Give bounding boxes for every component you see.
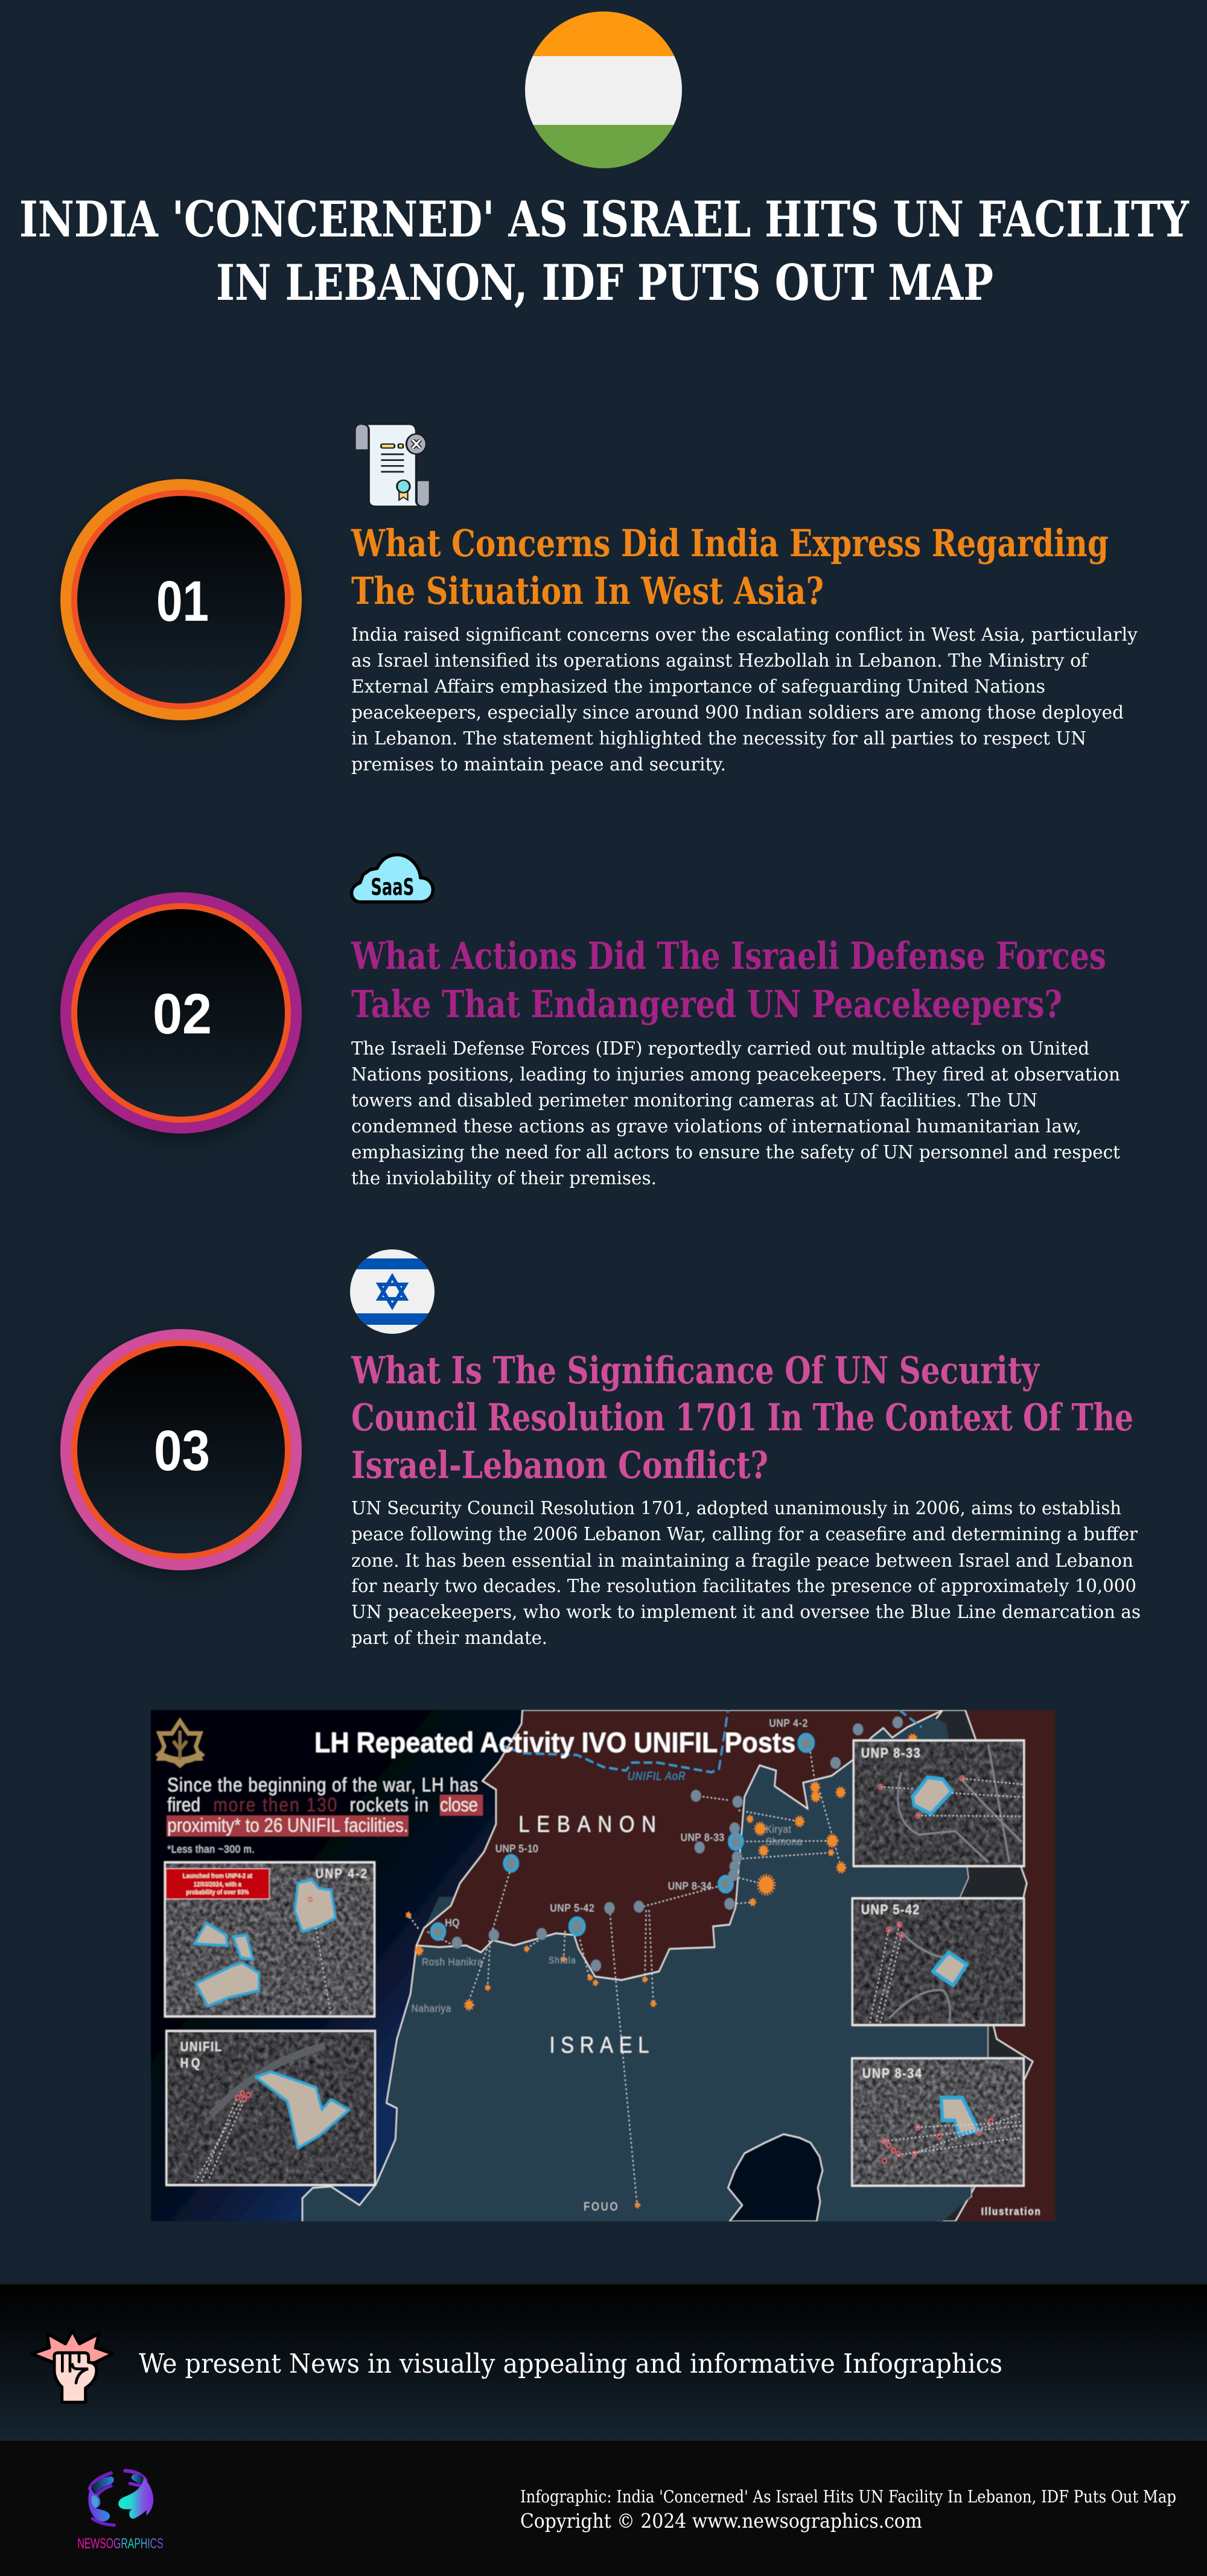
map labels: Illustration (981, 2206, 1040, 2218)
heading 01: The Situation In West Asia? (351, 569, 824, 613)
map labels: UNP 5-42 (550, 1902, 594, 1914)
body text 01 (351, 624, 1138, 775)
title: IN LEBANON, IDF PUTS OUT MAP (216, 255, 993, 312)
inset: UNP 4-2: probability of over 93% (186, 1889, 249, 1896)
heading 01 (351, 521, 1109, 613)
body text 02: emphasizing the need for all actors to ensure the safety of UN personnel and respect (351, 1142, 1120, 1163)
IDF emblem (155, 1721, 205, 1765)
map labels: UNP 8-33 (681, 1831, 724, 1844)
number badge 01 (60, 479, 302, 726)
map labels: UNP 4-2 (769, 1717, 807, 1729)
map labels: Shmona (766, 1835, 803, 1848)
Lebanon land (416, 1710, 943, 1980)
Syria side land (932, 1710, 1056, 2221)
icon: SaaS cloud (352, 855, 433, 902)
body text 01: in Lebanon. The statement highlighted the necessity for all parties to respect UN (351, 728, 1086, 749)
icon: certificate scroll (355, 424, 430, 506)
dotted attack lines (409, 1748, 841, 2205)
map intro text: more then 130 (213, 1795, 337, 1816)
icon: raised fist (32, 2330, 113, 2402)
map intro text: Since the beginning of the war, LH has (167, 1775, 478, 1796)
number badge 02: 02 (153, 982, 212, 1046)
inset: UNP 4-2: Launched from UNP4-2 at (183, 1873, 253, 1880)
inset: UNP 8-33: UNP 8-33 (861, 1745, 920, 1761)
map intro text: *Less than ~300 m. (167, 1843, 254, 1855)
body text 01: peacekeepers, especially since around 900 Indian soldiers are among those deployed (351, 702, 1124, 723)
body text 03: part of their mandate. (351, 1628, 547, 1649)
body text 02: The Israeli Defense Forces (IDF) reportedly carried out multiple attacks on United (351, 1038, 1089, 1059)
body text 01: premises to maintain peace and security. (351, 754, 726, 775)
body text 03: zone. It has been essential in maintaining a fragile peace between Israel and Lebanon (351, 1550, 1133, 1572)
title (19, 191, 1189, 312)
panel: section 01 (60, 424, 1138, 775)
logo: NewsoGraphics: NEWSOGRAPHICS (77, 2536, 164, 2552)
icon: India flag circle (525, 11, 682, 168)
UNIFIL area of responsibility line (499, 1710, 922, 1772)
map title: LH Repeated Activity IVO UNIFIL Posts (314, 1727, 795, 1759)
map labels: UNP 5-10 (495, 1842, 538, 1854)
inset: UNP 8-34 (852, 2058, 1024, 2186)
inset: UNP 5-42: UNP 5-42 (861, 1902, 919, 1917)
panel: tagline band (0, 2282, 1207, 2441)
map: LH repeated activity near UNIFIL posts (151, 1710, 1057, 2221)
number badge 03: 03 (154, 1419, 210, 1483)
heading 02 (351, 934, 1106, 1026)
body text 01: India raised significant concerns over the escalating conflict in West Asia, particularly (351, 624, 1138, 646)
body text 02 (351, 1038, 1120, 1189)
map labels: LEBANON (518, 1811, 656, 1837)
body text 02: towers and disabled perimeter monitoring cameras at UN facilities. The UN (351, 1090, 1037, 1111)
body text 03 (351, 1498, 1141, 1649)
map labels: ISRAEL (549, 2032, 649, 2058)
body text 03: UN Security Council Resolution 1701, adopted unanimously in 2006, aims to establish (351, 1498, 1121, 1519)
inset: UNP 5-42 (852, 1899, 1024, 2025)
body text 02: condemned these actions as grave violations of international humanitarian law, (351, 1116, 1081, 1137)
map labels: Nahariya (412, 2002, 451, 2014)
body text 01: as Israel intensified its operations against Hezbollah in Lebanon. The Ministry of (351, 650, 1089, 671)
number badge 01: 01 (156, 569, 209, 633)
body text 03: UN peacekeepers, who work to implement it and oversee the Blue Line demarcation as (351, 1602, 1141, 1623)
map intro text: close (440, 1795, 478, 1816)
body text 01: External Affairs emphasized the importance of safeguarding United Nations (351, 676, 1045, 697)
heading 02: Take That Endangered UN Peacekeepers? (351, 982, 1062, 1026)
number badge 03 (60, 1329, 302, 1576)
inset: UNIFIL HQ: UNIFIL (180, 2040, 221, 2054)
icon: Israel flag circle (350, 1249, 435, 1334)
inset: UNP 8-34: UNP 8-34 (862, 2066, 922, 2081)
inset: UNP 4-2 (165, 1862, 374, 2016)
map labels (412, 1717, 1040, 2218)
tagline text: We present News in visually appealing and informative Infographics (139, 2349, 1002, 2379)
map labels: Kiryat (766, 1823, 791, 1835)
map labels: UNP 8-34 (668, 1880, 712, 1892)
heading 03 (351, 1348, 1133, 1487)
map labels: HQ (445, 1917, 459, 1929)
map intro text: proximity* to 26 UNIFIL facilities. (167, 1815, 409, 1836)
number badge 02 (60, 892, 302, 1140)
panel: section 02 (60, 855, 1120, 1189)
map labels: UNIFIL AoR (628, 1769, 686, 1783)
map labels: Rosh Hanikra (422, 1956, 483, 1968)
post markers (432, 1716, 903, 1972)
logo: NewsoGraphics (77, 2471, 164, 2552)
inset: UNP 4-2: UNP 4-2 (315, 1867, 367, 1881)
map labels: Shtula (549, 1955, 576, 1966)
footer credit text: Copyright © 2024 www.newsographics.com (520, 2509, 922, 2533)
map labels: FOUO (584, 2200, 617, 2213)
panel: section 03 (60, 1249, 1141, 1649)
body text 03: peace following the 2006 Lebanon War, calling for a ceasefire and determining a buffer (351, 1524, 1138, 1545)
inset: UNP 8-33 (853, 1740, 1024, 1866)
inset: UNIFIL HQ (167, 2031, 375, 2185)
heading 03: Israel-Lebanon Conflict? (351, 1443, 768, 1487)
body text 03: for nearly two decades. The resolution facilitates the presence of approximately 10,000 (351, 1576, 1136, 1597)
Sea of Galilee (728, 2134, 823, 2221)
body text 02: Nations positions, leading to injuries among peacekeepers. They fired at observation (351, 1064, 1120, 1085)
Israel land (302, 1710, 988, 2221)
heading 03: What Is The Significance Of UN Security (351, 1348, 1040, 1392)
Golan dark strip (935, 1710, 1034, 2221)
map intro text: fired (167, 1795, 200, 1816)
body text 02: the inviolability of their premises. (351, 1168, 657, 1189)
map intro text (167, 1775, 483, 1855)
footer credit text (520, 2487, 1176, 2533)
icon: SaaS cloud: SaaS (371, 874, 414, 901)
panel: footer (0, 2441, 1207, 2576)
inset: UNIFIL HQ: HQ (180, 2057, 200, 2070)
bursts (406, 1735, 917, 2207)
inset: UNP 4-2: 12/03/2024, with a (194, 1882, 241, 1888)
map intro text: rockets in (350, 1795, 428, 1816)
